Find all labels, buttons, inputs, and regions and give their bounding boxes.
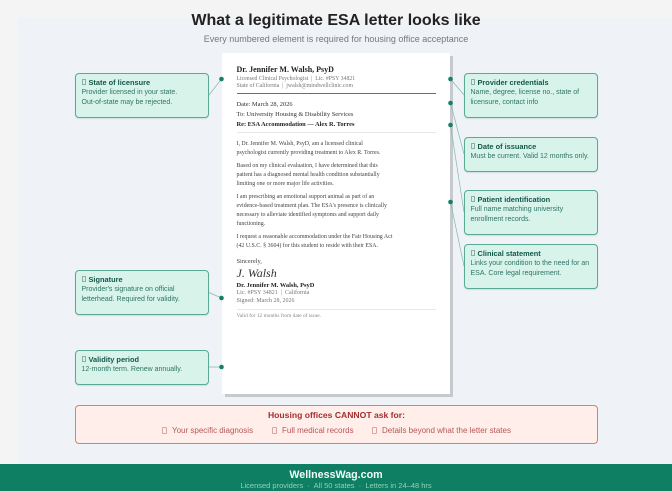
warning item: details: Details beyond what the letter states xyxy=(382,426,511,435)
callout: clinical statement: Links your condition to the need for an xyxy=(470,260,589,267)
footer details: Licensed providers · All 50 states · Letters in 24–48 hrs xyxy=(240,481,432,490)
callout: date of issuance: Date of issuance xyxy=(478,142,536,150)
panel: housing office warning xyxy=(75,405,598,444)
callout: state of licensure: State of licensure xyxy=(88,78,150,86)
subtitle: Every numbered element is required for housing office acceptance xyxy=(204,34,468,44)
callout: validity period xyxy=(75,350,209,385)
callout: signature: Signature xyxy=(88,274,123,284)
callout: clinical statement: Clinical statement xyxy=(478,248,541,258)
paragraph: clinical statement: I am prescribing an emotional support animal as part of an evidence-based treatment plan. The ESA's presence is clinically necessary to alleviate identified symptoms and support daily functioning. xyxy=(236,194,387,226)
divider xyxy=(236,132,436,133)
callout: patient identification: Patient identification xyxy=(478,194,550,204)
divider xyxy=(236,308,436,310)
callout: state of licensure xyxy=(75,73,209,118)
footer brand: WellnessWag.com xyxy=(289,469,383,481)
paragraph: introduction: I, Dr. Jennifer M. Walsh, PsyD, am a licensed clinical psychologist currently providing treatment to Alex R. Torres. xyxy=(236,140,380,156)
callout: signature: Provider's signature on official xyxy=(82,286,175,293)
recipient line: To: University Housing & Disability Services xyxy=(236,111,353,118)
callout: date of issuance xyxy=(464,137,598,172)
closing: Sincerely, xyxy=(236,258,262,264)
callout: clinical statement: ESA. Core legal requirement. xyxy=(470,270,562,276)
letterhead rule xyxy=(236,93,436,94)
subject line: Re: ESA Accommodation — Alex R. Torres xyxy=(236,121,354,128)
warning heading: Housing offices CANNOT ask for: xyxy=(268,410,405,420)
callout: provider credentials xyxy=(464,73,598,118)
callout: signature xyxy=(75,270,209,315)
callout: clinical statement xyxy=(464,244,598,289)
callout: signature: letterhead. Required for validity. xyxy=(82,296,180,302)
signature: J. Walsh xyxy=(236,266,277,280)
signer name: Dr. Jennifer M. Walsh, PsyD xyxy=(236,282,314,288)
callout: patient identification xyxy=(464,190,598,235)
letterhead contact: State of California | jwalsh@mindwellclinic.com xyxy=(236,83,353,89)
callout: state of licensure: Provider licensed in your state. xyxy=(82,89,177,96)
date line: Date: March 28, 2026 xyxy=(236,100,293,108)
warning item: records: Full medical records xyxy=(282,426,354,435)
callout: patient identification: enrollment records. xyxy=(470,216,530,222)
letterhead name: Dr. Jennifer M. Walsh, PsyD xyxy=(236,65,334,74)
callout: provider credentials: Name, degree, license no., state of xyxy=(470,89,579,96)
warning item: diagnosis: Your specific diagnosis xyxy=(172,426,253,435)
callout: state of licensure: Out-of-state may be rejected. xyxy=(82,98,172,106)
callout: provider credentials: licensure, contact info xyxy=(470,98,538,106)
paragraph: diagnosis: Based on my clinical evaluation, I have determined that this patient has a diagnosed mental health condition substantially limiting one or more major life activities. xyxy=(236,162,380,186)
paragraph: accommodation request: I request a reasonable accommodation under the Fair Housing Act (42 U.S.C. § 3604) for this student to reside with their ESA. xyxy=(236,234,392,248)
callout: provider credentials: Provider credentials xyxy=(478,78,549,86)
signer license: Lic. #PSY 34821 | California xyxy=(236,290,309,296)
signing date: Signed: March 28, 2026 xyxy=(236,298,294,304)
validity note: Valid for 12 months from date of issue. xyxy=(236,312,321,318)
letterhead credentials: Licensed Clinical Psychologist | Lic. #PSY 34821 xyxy=(236,76,355,82)
footer band xyxy=(0,464,672,491)
callout: date of issuance: Must be current. Valid 12 months only. xyxy=(470,153,589,160)
callout: validity period: 12-month term. Renew annually. xyxy=(82,366,182,373)
title: What a legitimate ESA letter looks like xyxy=(191,12,481,29)
callout: validity period: Validity period xyxy=(88,354,139,364)
panel: letter document xyxy=(222,53,450,394)
callout: patient identification: Full name matching university xyxy=(470,206,563,213)
